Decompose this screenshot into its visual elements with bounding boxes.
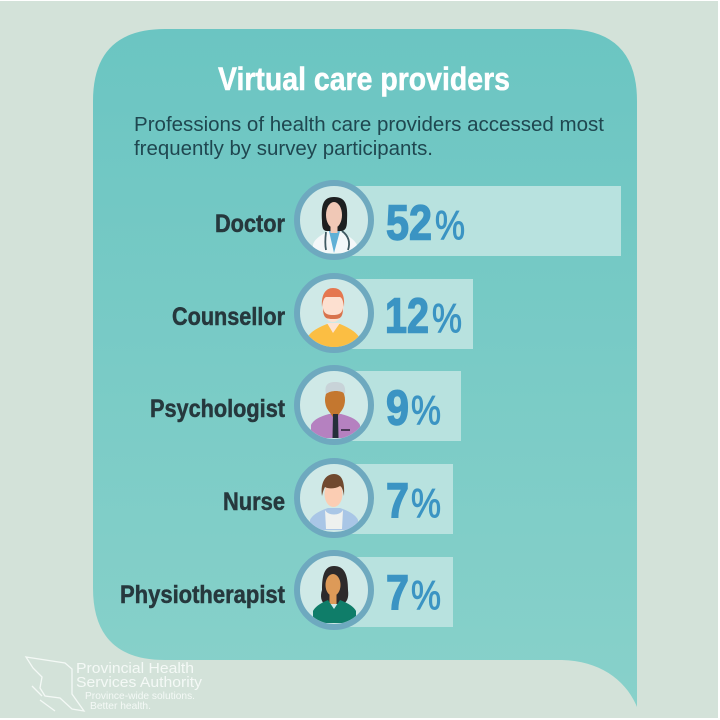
icon: BC map outline xyxy=(26,657,84,711)
logo name: Services Authority xyxy=(76,675,203,691)
subtitle: frequently by survey participants. xyxy=(134,138,433,160)
logo name: Provincial Health xyxy=(76,661,194,677)
value: 9%: 9 xyxy=(386,382,409,436)
value: 9%: % xyxy=(411,388,441,434)
row: Counsellor 12% xyxy=(172,276,473,350)
logo tagline xyxy=(85,690,195,712)
subtitle: Professions of health care providers accessed most xyxy=(134,114,604,136)
value: 7%: % xyxy=(411,480,441,526)
value: 52%: % xyxy=(435,202,465,248)
label: Nurse: Nurse xyxy=(223,488,285,516)
icon: psychologist xyxy=(297,368,371,442)
label: Physiotherapist: Physiotherapist xyxy=(120,581,286,609)
bar: Physiotherapist xyxy=(334,557,453,627)
value: 12%: 12 xyxy=(385,290,429,344)
row: Psychologist 9% xyxy=(150,368,461,442)
icon: counsellor xyxy=(297,276,371,350)
title: Virtual care providers xyxy=(218,61,510,97)
logo name xyxy=(76,661,203,691)
row: Doctor 52% xyxy=(215,183,621,257)
label: Doctor: Doctor xyxy=(215,210,285,238)
subtitle xyxy=(134,114,604,160)
logo: Provincial Health Services Authority xyxy=(26,657,203,712)
icon: doctor xyxy=(297,183,371,257)
label: Counsellor: Counsellor xyxy=(172,303,285,331)
icon: physiotherapist xyxy=(297,553,371,627)
logo tagline: Province-wide solutions. xyxy=(85,690,195,702)
value: 12%: % xyxy=(432,296,462,342)
value: 7%: % xyxy=(411,572,441,618)
value: 52%: 52 xyxy=(386,196,432,250)
bar: Nurse xyxy=(334,464,453,534)
bar: Doctor xyxy=(334,186,621,256)
icon: nurse xyxy=(297,461,371,535)
row: Physiotherapist 7% xyxy=(120,553,453,627)
label: Psychologist: Psychologist xyxy=(150,395,286,423)
value: 7%: 7 xyxy=(386,566,409,620)
logo tagline: Better health. xyxy=(90,700,151,712)
row: Nurse 7% xyxy=(223,461,453,535)
bar: Psychologist xyxy=(334,371,461,441)
value: 7%: 7 xyxy=(386,474,409,528)
bar: Counsellor xyxy=(334,279,473,349)
speech bubble panel xyxy=(93,29,637,707)
